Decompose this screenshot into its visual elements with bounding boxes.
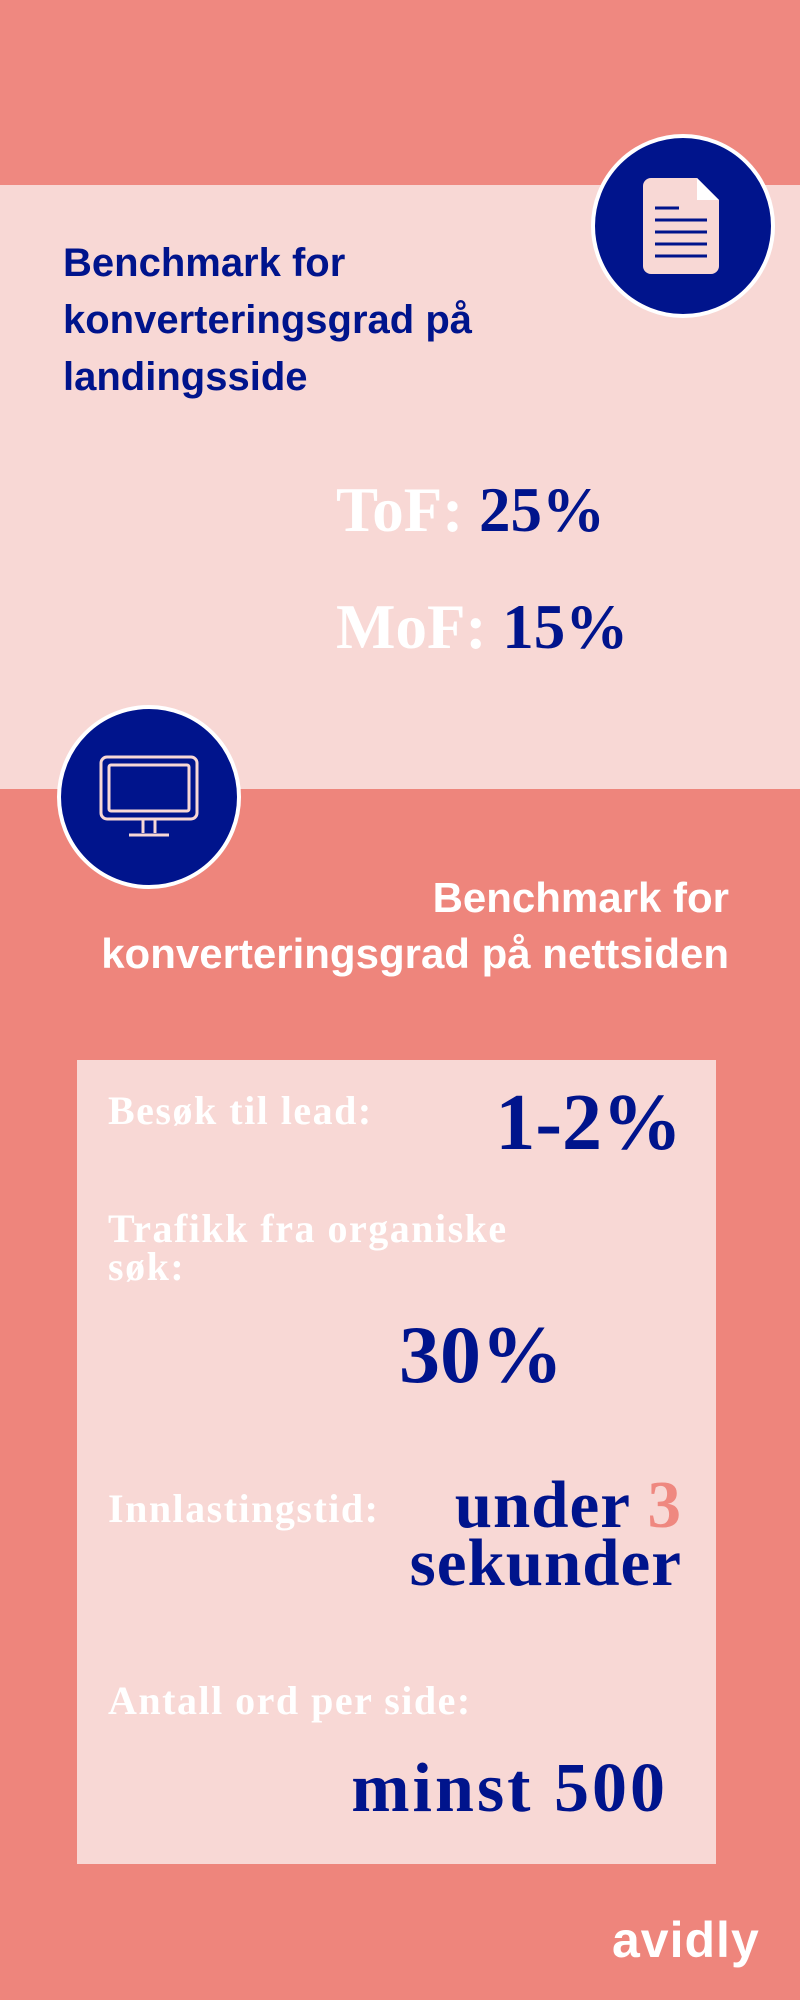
value: minst 500: minst 500 bbox=[351, 1750, 668, 1827]
value: under 3 seconds: under 3 bbox=[455, 1468, 682, 1542]
heading: website: Benchmark for bbox=[433, 874, 729, 921]
value: 1-2%: 1-2% bbox=[495, 1079, 682, 1167]
value: under 3 seconds: sekunder bbox=[410, 1526, 682, 1600]
value: 30%: 30% bbox=[399, 1309, 563, 1400]
label: visits to lead: Besøk til lead: bbox=[108, 1088, 373, 1133]
panel: website stats bbox=[77, 1060, 716, 1864]
stat: MoF: MoF: 15% bbox=[336, 592, 628, 662]
logo: avidly: avidly bbox=[612, 1912, 760, 1968]
label: words per page: Antall ord per side: bbox=[108, 1678, 472, 1723]
heading: landing page: Benchmark for konverteringsgrad på landingsside bbox=[63, 241, 472, 399]
icon: document bbox=[591, 134, 775, 318]
icon: monitor bbox=[57, 705, 241, 889]
panel: landing page benchmark bbox=[0, 185, 800, 789]
stat: ToF: ToF: 25% bbox=[336, 475, 605, 545]
heading: website: konverteringsgrad på nettsiden bbox=[101, 930, 729, 977]
value: under 3 seconds bbox=[410, 1468, 682, 1600]
label: organic traffic: Trafikk fra organiske søk: bbox=[108, 1206, 508, 1289]
heading: website bbox=[101, 874, 729, 977]
label: load time: Innlastingstid: bbox=[108, 1486, 379, 1531]
top band bbox=[0, 0, 800, 185]
